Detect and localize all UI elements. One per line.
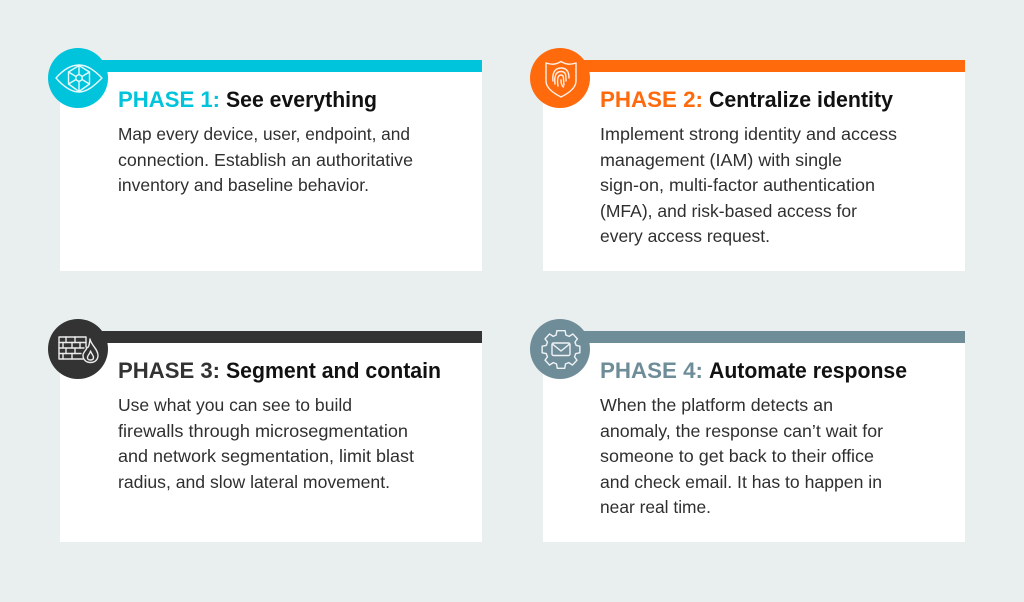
icon: brick firewall with flame xyxy=(59,337,98,362)
panel: phase 2: Centralize identity xyxy=(709,87,893,112)
text block: phase 3: radius, and slow lateral movement. xyxy=(118,472,390,492)
text block: phase 2: sign-on, multi-factor authentication xyxy=(600,175,875,195)
panel: phase 3: Segment and contain xyxy=(226,358,441,383)
panel: phase 1 xyxy=(48,48,482,271)
icon: eye with network xyxy=(56,65,102,92)
panel: phase 1: See everything xyxy=(226,87,377,112)
text block: phase 4: someone to get back to their office xyxy=(600,446,874,466)
text block: phase 1: connection. Establish an authoritative xyxy=(118,150,413,170)
text block: phase 4: and check email. It has to happen in xyxy=(600,472,882,492)
text block: phase 3 xyxy=(118,395,414,492)
text block: phase 2: every access request. xyxy=(600,226,770,246)
heading: phase 2: PHASE 2: xyxy=(600,87,703,112)
text block: phase 4: near real time. xyxy=(600,497,711,517)
panel: phase 4 xyxy=(530,319,965,542)
panel: phase 2 xyxy=(530,48,965,271)
text block: phase 4 xyxy=(600,395,883,517)
text block: phase 2: management (IAM) with single xyxy=(600,150,842,170)
text block: phase 4: When the platform detects an xyxy=(600,395,833,415)
text block: phase 2: (MFA), and risk-based access for xyxy=(600,201,857,221)
heading: phase 4: PHASE 4: xyxy=(600,358,703,383)
text block: phase 1: Map every device, user, endpoint, and xyxy=(118,124,410,144)
text block: phase 3: firewalls through microsegmentation xyxy=(118,421,408,441)
icon: gear with envelope xyxy=(542,331,580,368)
text block: phase 1: inventory and baseline behavior. xyxy=(118,175,369,195)
panel: phase 3 xyxy=(48,319,482,542)
text block: phase 3: and network segmentation, limit blast xyxy=(118,446,414,466)
text block: phase 4: anomaly, the response can’t wait for xyxy=(600,421,883,441)
text block: phase 3: Use what you can see to build xyxy=(118,395,352,415)
text block: phase 2 xyxy=(600,124,897,246)
icon: shield with fingerprint xyxy=(546,62,576,97)
heading: phase 1: PHASE 1: xyxy=(118,87,220,112)
heading: phase 3: PHASE 3: xyxy=(118,358,220,383)
text block: phase 2: Implement strong identity and access xyxy=(600,124,897,144)
text block: phase 1 xyxy=(118,124,413,195)
panel: phase 4: Automate response xyxy=(709,358,907,383)
